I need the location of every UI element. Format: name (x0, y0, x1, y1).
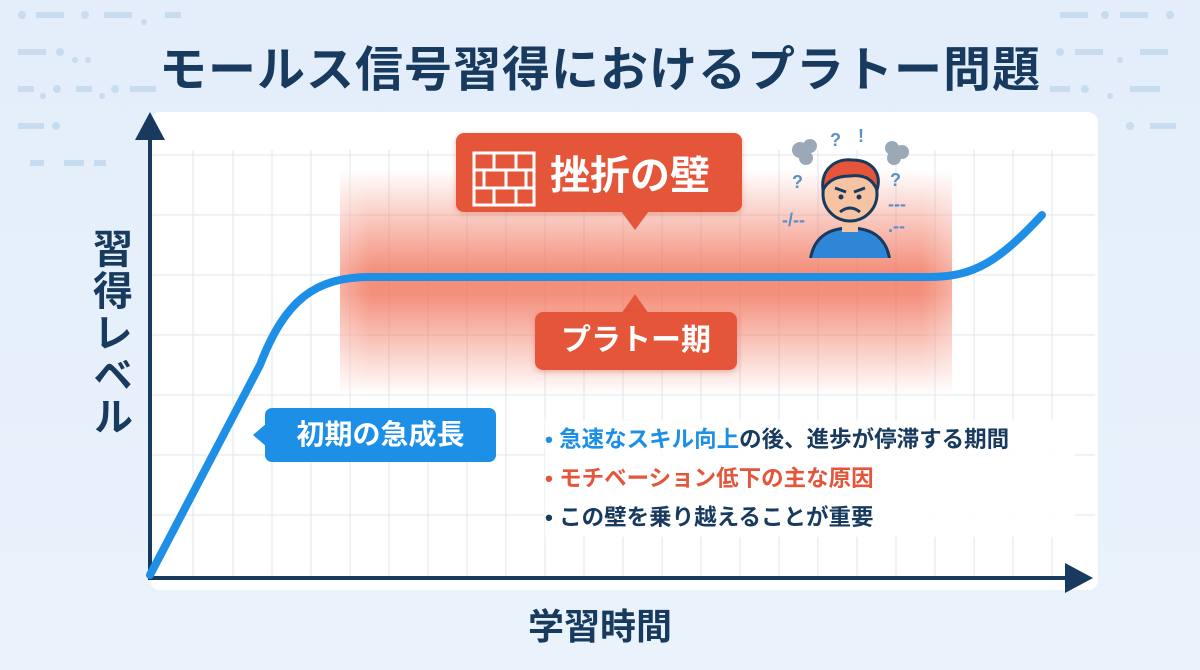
text block: bullets: • 急速なスキル向上の後、進歩が停滞する期間 (545, 427, 1009, 452)
callout: plateau period: プラトー期 (561, 324, 711, 357)
icon: frustrated person: ? (830, 130, 841, 150)
panel: chart area (150, 112, 1098, 590)
text block: bullets: • この壁を乗り越えることが重要 (545, 505, 873, 530)
learning curve (150, 215, 1042, 575)
callout: initial rapid growth: 初期の急成長 (296, 419, 464, 450)
callout: wall of frustration (453, 132, 745, 230)
icon: frustrated person: --- (888, 194, 906, 214)
plateau band (340, 170, 952, 395)
icon: frustrated person: .-- (888, 216, 905, 236)
text block: bullets: • モチベーション低下の主な原因 (545, 466, 874, 491)
callout: initial rapid growth (253, 408, 496, 462)
icon: frustrated person: -/-- (782, 210, 805, 230)
icon: brick wall (474, 153, 534, 205)
icon: frustrated person: ? (792, 172, 803, 192)
text block: bullets (545, 420, 1075, 537)
decorative morse background (18, 11, 1176, 166)
x-axis label: 学習時間 (528, 606, 672, 647)
y-axis label: 習得レベル (87, 228, 131, 438)
axes (135, 112, 1093, 593)
callout: wall of frustration: 挫折の壁 (550, 154, 710, 198)
icon: frustrated person (782, 128, 909, 258)
title: モールス信号習得におけるプラトー問題 (159, 44, 1041, 97)
icon: frustrated person: ? (890, 170, 901, 190)
callout: plateau period (532, 294, 740, 375)
